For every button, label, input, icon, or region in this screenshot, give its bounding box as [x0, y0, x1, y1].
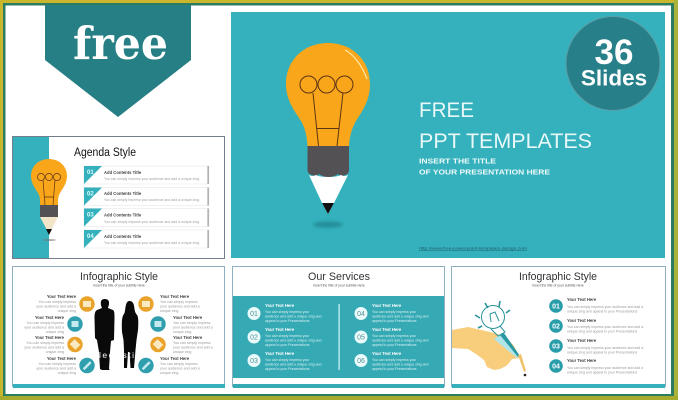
- services 04-06: You can simply impress your: [372, 310, 417, 314]
- panel: agenda style: [12, 136, 224, 258]
- numbered list: unique zing and appeal to your Presentations: [567, 310, 637, 314]
- numbered list: [549, 297, 643, 374]
- overlaid caption: leo sti: [99, 350, 134, 360]
- agenda row 4: 04: [87, 234, 94, 240]
- right text items: unique zing: [173, 350, 191, 354]
- services 04-06: Your Text Here: [372, 327, 402, 332]
- left text items: Your Text Here: [47, 294, 77, 299]
- divider: [338, 304, 340, 370]
- numbered list: You can simply impress your audience and add a: [567, 305, 643, 309]
- services 04-06: You can simply impress your: [372, 358, 417, 362]
- services 04-06: audience and add a unique zing and: [372, 314, 428, 318]
- agenda row 2: You can simply impress your audience and add a unique zing.: [104, 198, 200, 202]
- left text items: You can simply impress: [26, 321, 64, 325]
- services 01-03: 02: [250, 334, 258, 342]
- services 01-03: You can simply impress your: [265, 334, 310, 338]
- right text items: You can simply impress: [160, 300, 198, 304]
- numbered list: unique zing and appeal to your Presentations: [567, 370, 637, 374]
- services 01-03: audience and add a unique zing and: [265, 362, 321, 366]
- icon circles: [67, 296, 166, 373]
- right text items: You can simply impress: [160, 362, 198, 366]
- silhouette: woman: [122, 301, 138, 368]
- left text items: Your Text Here: [35, 335, 65, 340]
- services 04-06: You can simply impress your: [372, 334, 417, 338]
- left text items: Your Text Here: [35, 315, 65, 320]
- right text items: your audience and add a: [160, 304, 200, 308]
- services 04-06: appeal to your Presentations: [372, 319, 417, 323]
- services 04-06: Your Text Here: [372, 303, 402, 308]
- agenda row 3: Add Contents Title: [104, 212, 142, 218]
- url: http://www.free-powerpoint-templates-design.com: [419, 246, 528, 250]
- badge: 36 slides: 36: [595, 33, 633, 72]
- agenda row 4: Add Contents Title: [104, 234, 142, 239]
- numbered list: unique zing and appeal to your Presentations: [567, 330, 637, 334]
- left text items: You can simply impress: [38, 300, 76, 304]
- numbered list: unique zing and appeal to your Presentations: [567, 350, 637, 354]
- agenda row 4: You can simply impress your audience and add a unique zing.: [104, 241, 200, 245]
- services 01-03: Your Text Here: [265, 351, 295, 356]
- services 01-03: Your Text Here: [265, 327, 295, 332]
- services 01-03: 03: [250, 358, 258, 365]
- right text items: unique zing: [160, 309, 178, 313]
- numbered list: You can simply impress your audience and add a: [567, 366, 643, 370]
- ribbon: free: [45, 5, 191, 117]
- left text items: unique zing: [58, 371, 76, 375]
- heading: Infographic Style: [519, 271, 597, 283]
- agenda row 3: You can simply impress your audience and add a unique zing.: [104, 220, 200, 224]
- left text items: your audience and add a: [24, 326, 64, 330]
- agenda row 4: [84, 230, 209, 248]
- right text items: You can simply impress: [173, 341, 211, 345]
- right text items: your audience and add a: [160, 366, 200, 370]
- services 04-06: Your Text Here: [372, 351, 402, 356]
- left text items: unique zing: [58, 309, 76, 313]
- services 04-06: [354, 303, 428, 371]
- numbered list: Your Text Here: [567, 318, 597, 323]
- left text items: You can simply impress: [26, 341, 64, 345]
- services 01-03: appeal to your Presentations: [265, 343, 310, 347]
- panel: our services: [232, 266, 444, 388]
- agenda row 1: Add Contents Title: [104, 170, 142, 175]
- right text items: Your Text Here: [160, 356, 190, 361]
- services 04-06: appeal to your Presentations: [372, 343, 417, 347]
- services 04-06: appeal to your Presentations: [372, 367, 417, 371]
- services 01-03: Your Text Here: [265, 303, 295, 308]
- agenda row 2: 02: [87, 192, 94, 198]
- services 01-03: [248, 303, 321, 371]
- left text items: your audience and add a: [36, 304, 76, 308]
- agenda row 2: Add Contents Title: [104, 191, 142, 196]
- numbered list: 04: [552, 364, 560, 370]
- numbered list: Your Text Here: [567, 338, 597, 343]
- left text items: unique zing: [46, 350, 64, 354]
- services 04-06: audience and add a unique zing and: [372, 338, 428, 342]
- numbered list: You can simply impress your audience and add a: [567, 325, 643, 329]
- left text items: You can simply impress: [38, 362, 76, 366]
- icon: small pencil bulb: [31, 159, 67, 241]
- agenda row 1: 01: [87, 170, 94, 176]
- left text items: your audience and add a: [24, 346, 64, 350]
- services 01-03: You can simply impress your: [265, 310, 310, 314]
- subtitle: [419, 156, 550, 176]
- heading: Infographic Style: [80, 271, 158, 283]
- numbered list: 02: [552, 324, 560, 330]
- left text items: Your Text Here: [47, 356, 77, 361]
- numbered list: You can simply impress your audience and add a: [567, 346, 643, 350]
- services 01-03: audience and add a unique zing and: [265, 314, 321, 318]
- services 01-03: 01: [250, 311, 258, 318]
- panel: infographic style people: [12, 266, 225, 388]
- right text items: unique zing: [173, 330, 191, 334]
- services 04-06: 06: [357, 358, 365, 365]
- services 04-06: audience and add a unique zing and: [372, 362, 428, 366]
- subheading: Insert the title of your subtitle Here: [313, 284, 365, 288]
- left text items: unique zing: [46, 330, 64, 334]
- right text items: Your Text Here: [173, 335, 203, 340]
- title: FREE: FREE: [419, 99, 474, 122]
- right text items: Your Text Here: [173, 315, 203, 320]
- right text items: You can simply impress: [173, 321, 211, 325]
- title: PPT TEMPLATES: PPT TEMPLATES: [419, 130, 592, 153]
- subtitle: INSERT THE TITLE: [419, 156, 496, 166]
- silhouette: man: [94, 299, 114, 370]
- badge: 36 slides: [566, 16, 660, 110]
- right text items: unique zing: [160, 371, 178, 375]
- heading: agenda style: Agenda Style: [74, 147, 136, 159]
- agenda row 1: You can simply impress your audience and add a unique zing.: [104, 177, 200, 181]
- agenda row 2: [84, 188, 209, 206]
- ribbon: free: free: [73, 17, 168, 70]
- services 01-03: audience and add a unique zing and: [265, 338, 321, 342]
- subheading: Insert the title of your subtitle Here: [532, 284, 584, 288]
- right text items: Your Text Here: [160, 294, 190, 299]
- numbered list: Your Text Here: [567, 358, 597, 363]
- services 04-06: 05: [357, 334, 365, 342]
- numbered list: 03: [552, 344, 560, 350]
- heading: Our Services: [308, 271, 370, 283]
- subtitle: OF YOUR PRESENTATION HERE: [419, 168, 550, 176]
- numbered list: 01: [552, 304, 560, 310]
- badge: 36 slides: Slides: [581, 66, 647, 90]
- left text items: your audience and add a: [36, 366, 76, 370]
- agenda row 3: [84, 208, 209, 226]
- right text items: your audience and add a: [173, 326, 213, 330]
- illustration: hand drawing bulb: [452, 301, 526, 376]
- panel: infographic style hand: [452, 266, 666, 388]
- services 04-06: 04: [357, 311, 365, 318]
- services 01-03: You can simply impress your: [265, 358, 310, 362]
- main slide panel: [231, 12, 665, 258]
- subheading: Insert the title of your subtitle Here: [93, 284, 145, 288]
- agenda row 1: [84, 166, 209, 184]
- services 01-03: appeal to your Presentations: [265, 319, 310, 323]
- icon: pencil light bulb: [286, 43, 370, 228]
- agenda row 3: 03: [87, 212, 94, 218]
- numbered list: Your Text Here: [567, 297, 597, 302]
- services 01-03: appeal to your Presentations: [265, 367, 310, 371]
- left text items: [24, 294, 77, 375]
- right text items: your audience and add a: [173, 346, 213, 350]
- right text items: [160, 294, 213, 375]
